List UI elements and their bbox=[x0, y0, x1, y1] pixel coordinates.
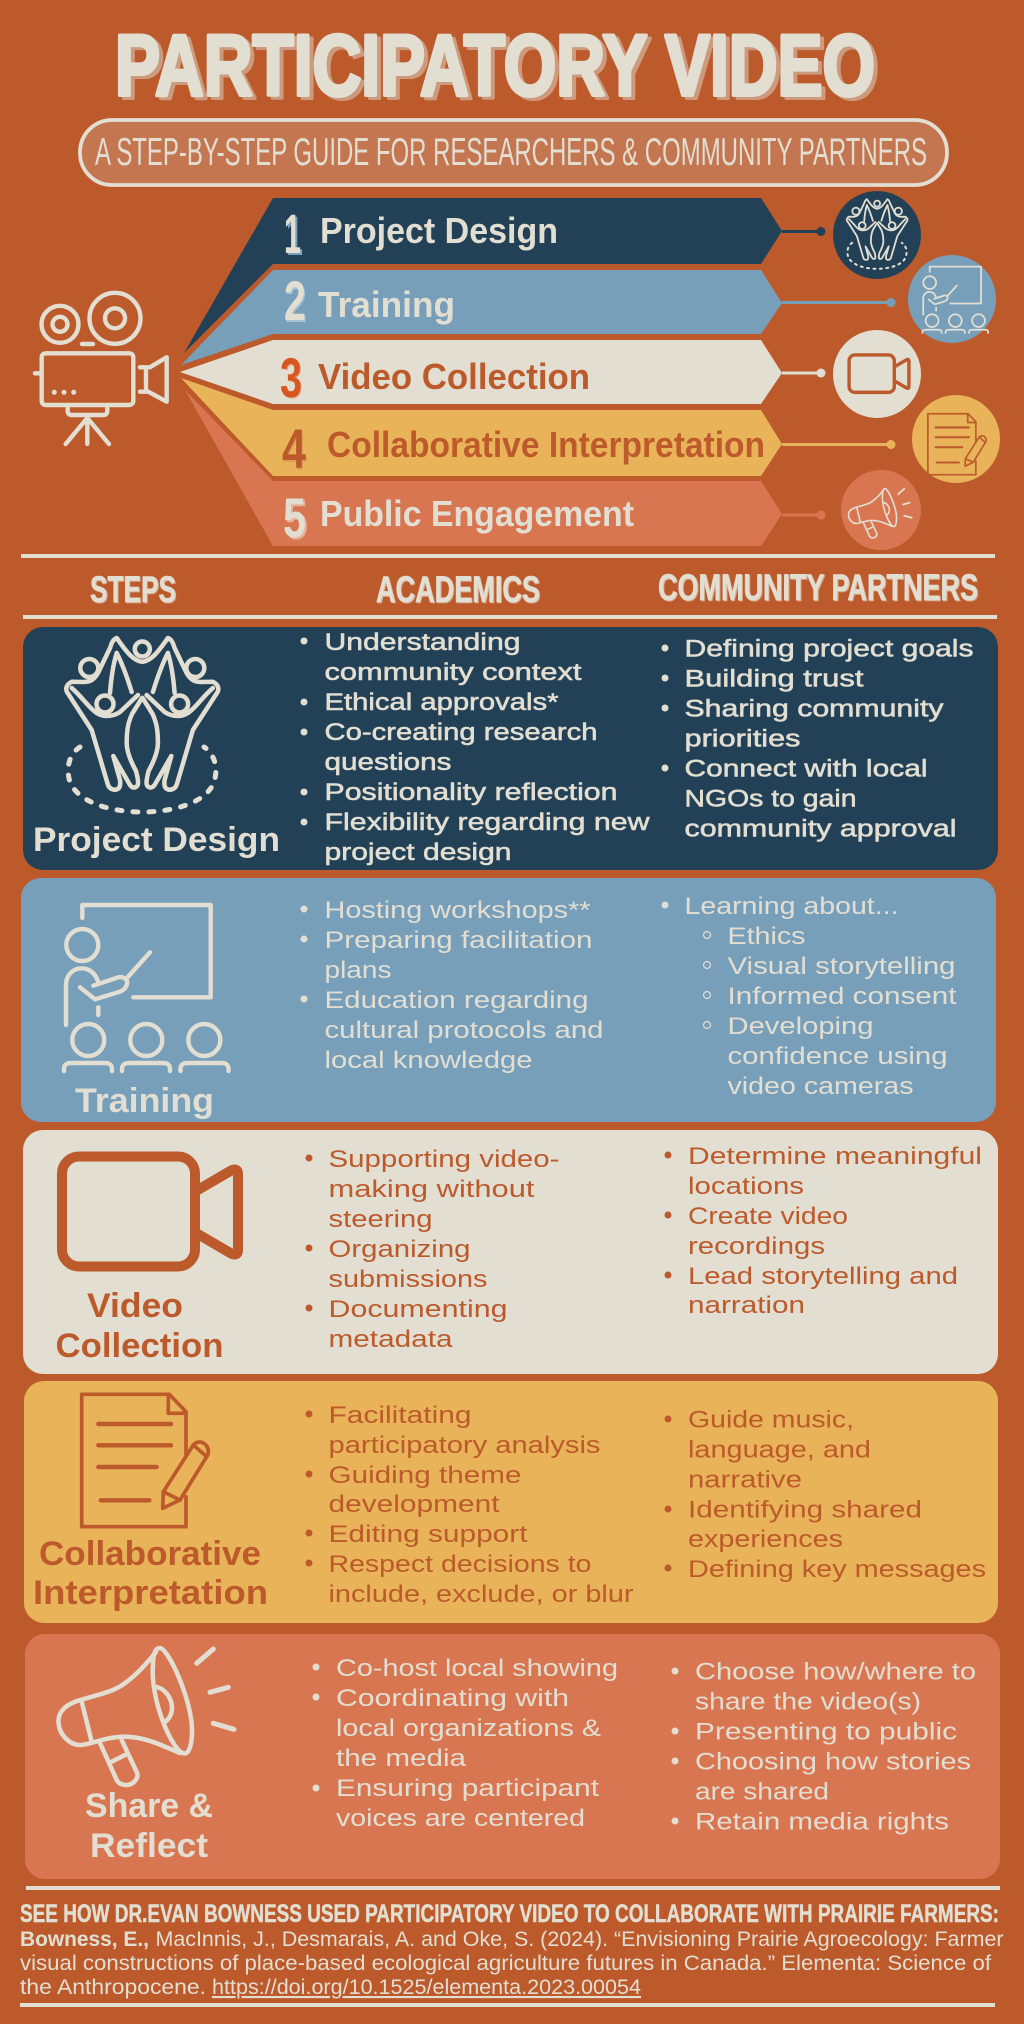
community partners list: NGOs to gain bbox=[684, 786, 856, 812]
community partners list: narration bbox=[688, 1292, 805, 1319]
academics list: Coordinating with bbox=[336, 1685, 569, 1712]
icon circle: public engagement bbox=[841, 470, 921, 550]
academics list: Guiding theme bbox=[328, 1462, 522, 1489]
community partners list: Guide music, bbox=[688, 1406, 854, 1434]
step label: video collection bbox=[56, 1287, 224, 1365]
community partners list: Choosing how stories bbox=[695, 1748, 971, 1776]
panel: project design bbox=[23, 627, 998, 870]
arrow 2: training: Training bbox=[318, 284, 455, 325]
citation: MacInnis, J., Desmarais, A. and Oke, S. (2024). “Envisioning Prairie Agroecology: Farmer bbox=[156, 1928, 1004, 1951]
step arrows bbox=[180, 198, 896, 549]
community partners list: Identifying shared bbox=[688, 1496, 922, 1524]
icon: video camera bbox=[62, 1156, 238, 1266]
citation: https://doi.org/10.1525/elementa.2023.00054 bbox=[212, 1976, 641, 1999]
academics list bbox=[306, 1402, 634, 1608]
community partners list bbox=[664, 1143, 982, 1319]
column heading: academics: ACADEMICS bbox=[376, 569, 540, 610]
arrow 4: collaborative interpretation bbox=[181, 378, 896, 480]
column heading: steps: STEPS bbox=[90, 569, 176, 610]
academics list: cultural protocols and bbox=[324, 1017, 604, 1044]
academics list: the media bbox=[336, 1745, 466, 1772]
community partners list: are shared bbox=[695, 1778, 829, 1806]
academics list: Organizing bbox=[328, 1236, 470, 1263]
academics list bbox=[312, 1655, 618, 1832]
step label: share and reflect: Reflect bbox=[90, 1827, 208, 1865]
step label: collaborative interpretation: Interpretation bbox=[33, 1574, 268, 1612]
arrow 4: collaborative interpretation: Collaborative Interpretation bbox=[327, 424, 765, 465]
icon circle: collaborative interpretation bbox=[912, 395, 1000, 483]
panel: share and reflect bbox=[25, 1634, 1000, 1879]
arrow 4: collaborative interpretation: 4 bbox=[282, 417, 306, 480]
community partners list: Presenting to public bbox=[695, 1718, 957, 1746]
arrow 1: project design: Project Design bbox=[320, 210, 558, 251]
academics list: Hosting workshops** bbox=[324, 897, 591, 924]
academics list: Facilitating bbox=[328, 1402, 472, 1429]
step label: collaborative interpretation: Collaborative bbox=[39, 1535, 261, 1573]
community partners list: Create video bbox=[688, 1203, 848, 1230]
academics list: Flexibility regarding new bbox=[324, 809, 650, 836]
academics list: Positionality reflection bbox=[324, 779, 618, 806]
academics list: local organizations & bbox=[336, 1715, 601, 1742]
arrow 5: public engagement bbox=[185, 390, 826, 549]
community partners list: Choose how/where to bbox=[695, 1658, 976, 1686]
citation: visual constructions of place-based ecological agriculture futures in Canada.” Elementa: Science of bbox=[20, 1952, 991, 1975]
academics list: making without bbox=[328, 1176, 535, 1203]
academics list bbox=[300, 629, 650, 866]
academics list: Co-host local showing bbox=[336, 1655, 618, 1682]
community partners list: confidence using bbox=[728, 1043, 948, 1070]
academics list: Education regarding bbox=[324, 987, 588, 1014]
community partners list: video cameras bbox=[728, 1073, 914, 1100]
citation bbox=[20, 1928, 1004, 1999]
step label: share and reflect bbox=[85, 1787, 213, 1865]
community partners list: share the video(s) bbox=[695, 1688, 921, 1716]
step label: share and reflect: Share & bbox=[85, 1787, 213, 1825]
community partners list: recordings bbox=[688, 1233, 825, 1260]
community partners list: Visual storytelling bbox=[728, 953, 956, 980]
icon circle: video collection bbox=[833, 330, 921, 418]
icon: people bbox=[66, 638, 218, 812]
step label: training: Training bbox=[75, 1082, 214, 1120]
step label: project design: Project Design bbox=[33, 821, 280, 859]
community partners list: Determine meaningful bbox=[688, 1143, 982, 1170]
community partners list: Lead storytelling and bbox=[688, 1263, 958, 1290]
academics list: project design bbox=[324, 839, 512, 866]
community partners list: priorities bbox=[684, 726, 800, 752]
step label: video collection: Collection bbox=[56, 1327, 224, 1365]
academics list: plans bbox=[324, 957, 392, 984]
academics list: questions bbox=[324, 749, 452, 776]
icon: teacher and students bbox=[64, 905, 228, 1071]
arrow 2: training: 2 bbox=[284, 269, 306, 332]
community partners list: Ethics bbox=[728, 923, 806, 950]
citation: Bowness, E., bbox=[20, 1928, 149, 1951]
community partners list: Learning about... bbox=[684, 893, 898, 920]
community partners list bbox=[662, 893, 957, 1100]
academics list: Understanding bbox=[324, 629, 520, 656]
community partners list: language, and bbox=[688, 1436, 871, 1464]
community partners list: Retain media rights bbox=[695, 1808, 949, 1836]
community partners list bbox=[662, 636, 974, 842]
panel: video collection bbox=[23, 1130, 998, 1374]
arrow 2: training bbox=[181, 269, 896, 365]
academics list: Co-creating research bbox=[324, 719, 598, 746]
academics list: Ethical approvals* bbox=[324, 689, 559, 716]
arrow 3: video collection bbox=[180, 340, 826, 409]
icon circle: training bbox=[908, 255, 996, 343]
academics list: steering bbox=[328, 1206, 432, 1233]
academics list bbox=[306, 1146, 560, 1353]
icon: film camera bbox=[35, 293, 167, 444]
icon: megaphone bbox=[58, 1648, 234, 1785]
community partners list: locations bbox=[688, 1173, 804, 1200]
community partners list: experiences bbox=[688, 1526, 843, 1553]
step label: collaborative interpretation bbox=[33, 1535, 268, 1612]
community partners list: community approval bbox=[684, 816, 956, 842]
community partners list: Building trust bbox=[684, 666, 864, 692]
community partners list: Developing bbox=[728, 1013, 874, 1040]
community partners list bbox=[672, 1658, 976, 1836]
arrow 5: public engagement: Public Engagement bbox=[320, 493, 634, 534]
step label: video collection: Video bbox=[87, 1287, 183, 1325]
community partners list: narrative bbox=[688, 1466, 802, 1494]
icon circle: project design bbox=[833, 191, 921, 279]
panel: collaborative interpretation bbox=[24, 1381, 998, 1623]
academics list: Documenting bbox=[328, 1296, 508, 1323]
community partners list: Connect with local bbox=[684, 756, 928, 782]
academics list: participatory analysis bbox=[328, 1432, 600, 1459]
community partners list bbox=[664, 1406, 986, 1583]
academics list bbox=[300, 897, 604, 1074]
arrow 1: project design bbox=[184, 198, 826, 353]
academics list: metadata bbox=[328, 1326, 453, 1353]
community partners list: Defining key messages bbox=[688, 1556, 986, 1583]
panel: training bbox=[21, 878, 996, 1122]
icon: document and pencil bbox=[82, 1394, 208, 1527]
academics list: Preparing facilitation bbox=[324, 927, 592, 954]
academics list: Supporting video- bbox=[328, 1146, 560, 1173]
academics list: voices are centered bbox=[336, 1805, 585, 1832]
academics list: Ensuring participant bbox=[336, 1775, 599, 1802]
citation: the Anthropocene. bbox=[20, 1976, 206, 1999]
arrow 1: project design: 1 bbox=[284, 202, 301, 265]
arrow 5: public engagement: 5 bbox=[283, 486, 306, 549]
community partners list: Informed consent bbox=[728, 983, 957, 1010]
arrow 3: video collection: 3 bbox=[280, 346, 302, 409]
academics list: community context bbox=[324, 659, 582, 686]
community partners list: Defining project goals bbox=[684, 636, 974, 662]
academics list: submissions bbox=[328, 1266, 488, 1293]
subtitle pill bbox=[80, 120, 947, 185]
academics list: include, exclude, or blur bbox=[328, 1581, 634, 1608]
community partners list: Sharing community bbox=[684, 696, 944, 722]
academics list: Respect decisions to bbox=[328, 1551, 592, 1578]
academics list: development bbox=[328, 1491, 500, 1518]
academics list: Editing support bbox=[328, 1521, 528, 1548]
arrow 3: video collection: Video Collection bbox=[318, 356, 590, 397]
academics list: local knowledge bbox=[324, 1047, 532, 1074]
